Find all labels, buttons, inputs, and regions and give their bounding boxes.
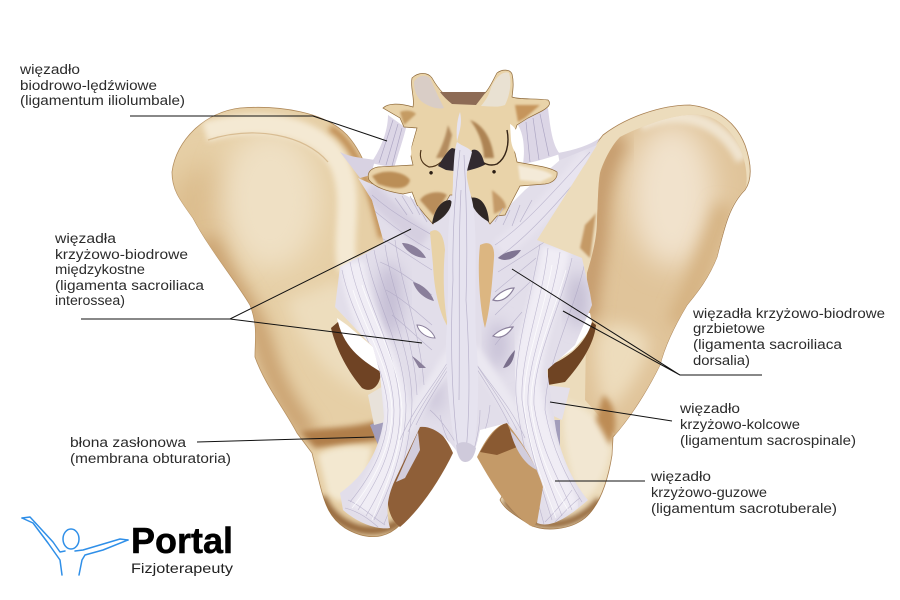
fibre fan below vertebra <box>395 196 532 226</box>
left pubic ramus, inner surface <box>388 424 453 527</box>
coccyx tip <box>456 442 476 462</box>
label: obturator membrane: (membrana obturatoria) <box>70 451 231 466</box>
sacrospinous ligament, left <box>368 385 385 425</box>
label: dorsal sacroiliac ligaments <box>692 306 885 368</box>
posterior sacral foramina, right <box>493 250 521 368</box>
label: dorsal sacroiliac ligaments: więzadła krzyżowo-biodrowe <box>692 306 885 321</box>
right superior articular process <box>481 72 510 107</box>
leader: sacrospinous ligament <box>550 402 672 421</box>
right pubic ramus, inner surface <box>477 423 545 527</box>
label: dorsal sacroiliac ligaments: (ligamenta sacroiliaca <box>693 337 843 352</box>
label: sacrotuberous ligament: (ligamentum sacrotuberale) <box>651 501 837 516</box>
articular line right <box>484 130 508 165</box>
right sacral bone strip <box>479 243 494 328</box>
right sacral foramen, dark <box>470 197 489 222</box>
logo: Portal Fizjoterapeuty <box>22 517 233 576</box>
label: sacrospinous ligament <box>679 401 856 448</box>
obturator membrane, right <box>548 420 560 452</box>
leader lines <box>81 116 762 481</box>
gap beside right iliolumbar ligament <box>510 124 523 160</box>
label: iliolumbar ligament: (ligamentum iliolumbale) <box>20 93 185 108</box>
right iliolumbar ligament <box>518 108 560 164</box>
label: obturator membrane <box>70 435 231 466</box>
right hip bone <box>500 100 760 529</box>
right iliolumbar lower band <box>556 138 600 180</box>
leader: iliolumbar ligament <box>130 116 387 141</box>
left iliolumbar ligament <box>371 115 406 168</box>
right obturator foramen: brown rim <box>548 322 596 385</box>
dark patch on right ramus <box>480 423 517 455</box>
crossing band left <box>410 356 446 426</box>
label: sacrotuberous ligament: więzadło <box>650 469 711 484</box>
central sacral ligament column <box>446 112 478 459</box>
label: interosseous sacroiliac ligaments: krzyżowo-biodrowe <box>55 247 188 262</box>
left sacral bone strip <box>430 230 448 327</box>
membrane over left ramus <box>396 432 420 482</box>
label: interosseous sacroiliac ligaments: międzykostne <box>55 262 145 277</box>
label: interosseous sacroiliac ligaments: (ligamenta sacroiliaca <box>55 278 205 293</box>
illustration: pelvis seen from behind <box>165 70 760 537</box>
ligament mass <box>335 145 597 528</box>
leader: interosseous sacroiliac ligaments <box>81 229 422 343</box>
label: interosseous sacroiliac ligaments <box>54 231 205 308</box>
leader: sacrotuberous ligament <box>555 480 645 482</box>
bright right band <box>527 248 566 512</box>
wordmark: Portal <box>131 520 233 561</box>
bright left band <box>352 262 396 512</box>
label: interosseous sacroiliac ligaments: interossea) <box>55 293 125 308</box>
icon: figure with raised arms <box>22 517 128 575</box>
vertebral canal <box>440 92 486 105</box>
soft shadows <box>378 262 402 338</box>
label: sacrospinous ligament: krzyżowo-kolcowe <box>680 417 800 432</box>
label: sacrospinous ligament: więzadło <box>679 401 740 416</box>
small foramen dots <box>429 170 496 175</box>
crossing band right <box>477 352 516 422</box>
right obturator foramen: opening <box>550 313 593 365</box>
articular line left <box>420 150 441 167</box>
label: sacrotuberous ligament: krzyżowo-guzowe <box>651 485 767 500</box>
label: obturator membrane: błona zasłonowa <box>70 435 187 450</box>
label: sacrotuberous ligament <box>650 469 837 516</box>
fifth lumbar vertebra and sacral crest <box>368 70 557 224</box>
tagline: Fizjoterapeuty <box>131 560 233 576</box>
upper diagonal band left <box>368 190 425 240</box>
obturator membrane, left <box>370 418 385 468</box>
leader: dorsal sacroiliac ligaments <box>512 269 762 375</box>
left superior articular process <box>414 76 444 108</box>
left iliolumbar lower band <box>340 152 375 178</box>
label: dorsal sacroiliac ligaments: grzbietowe <box>693 321 765 336</box>
left sacral foramen, dark <box>432 200 452 224</box>
upper diagonal band right <box>556 166 584 209</box>
posterior sacral foramina, left <box>402 243 435 368</box>
gap beside left iliolumbar ligament <box>403 128 416 163</box>
left obturator foramen: brown rim <box>331 322 381 390</box>
fibres <box>342 152 594 527</box>
sacrospinous ligament, right <box>545 385 570 420</box>
iliac fossa shading <box>585 115 747 434</box>
left hip bone <box>165 107 400 537</box>
shading on vertebra <box>372 105 553 216</box>
leader: obturator membrane <box>197 437 374 442</box>
label: interosseous sacroiliac ligaments: więzadła <box>54 231 117 246</box>
label: dorsal sacroiliac ligaments: dorsalia) <box>693 353 750 368</box>
label: iliolumbar ligament: więzadło <box>19 62 80 77</box>
left obturator foramen: opening <box>337 318 381 373</box>
membrane over right ramus <box>510 430 537 470</box>
label: sacrospinous ligament: (ligamentum sacrospinale) <box>680 433 856 448</box>
label: iliolumbar ligament: biodrowo-lędźwiowe <box>20 78 157 93</box>
label: iliolumbar ligament <box>19 62 185 108</box>
dark gap between lamina and sacrum <box>438 148 486 172</box>
